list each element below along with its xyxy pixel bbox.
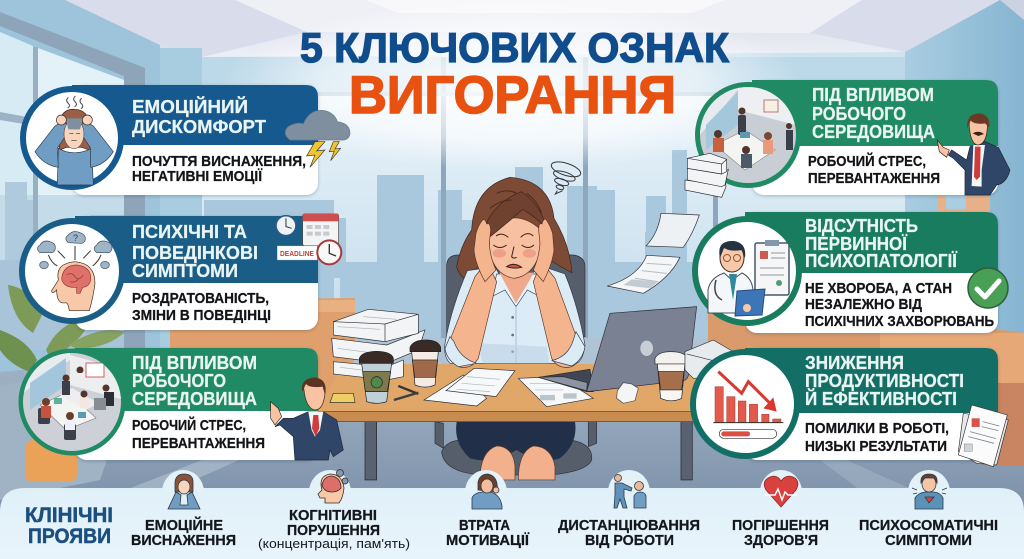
item: cognitive impairment: КОГНІТИВНІ [289,508,377,524]
icon: clock, calendar and deadline [276,214,341,264]
heading: ПСИХОПАТОЛОГІЇ [805,251,958,271]
desk [315,364,712,480]
description: НЕЗАЛЕЖНО ВІД [805,296,922,313]
heading: ДИСКОМФОРТ [132,117,266,137]
description [805,280,994,330]
description: ЗМІНИ В ПОВЕДІНЦІ [132,307,271,324]
item: psychosomatic symptoms: СИМПТОМИ [885,533,972,549]
plant and pot [0,285,125,482]
laptop [538,307,697,392]
icon: green check badge [968,268,1008,308]
description [132,416,265,452]
heading: ЕМОЦІЙНИЙ [132,96,248,117]
main illustration: exhausted woman at desk [315,159,733,480]
description: НИЗЬКІ РЕЗУЛЬТАТИ [805,438,947,455]
heading: КЛІНІЧНІ [25,504,113,527]
face [489,218,541,278]
back window [202,57,905,342]
item: psychosomatic symptoms: ПСИХОСОМАТИЧНІ [859,518,998,534]
facial features [493,234,534,268]
panel: mental and behavioural symptoms [22,214,341,330]
item: psychosomatic symptoms [859,470,998,549]
icon: person with chest pain [912,474,947,509]
heading: ПРОЯВИ [28,525,111,548]
description [132,153,306,185]
description: РОЗДРАТОВАНІСТЬ, [132,290,269,307]
deadline tag text: DEADLINE [280,249,314,258]
item: cognitive impairment [258,470,410,551]
floor [0,340,1024,559]
icon: stack of papers [685,153,728,197]
icon: pointing manager [271,377,343,460]
description: ПОМИЛКИ В РОБОТІ, [805,420,949,437]
desk papers [424,368,593,407]
item: distancing from work [558,470,700,549]
heading [25,504,113,548]
item: emotional exhaustion: ЕМОЦІЙНЕ [145,516,223,534]
stress swirl [550,159,582,194]
heading [132,96,266,137]
heading: ПСИХІЧНІ ТА [132,222,247,242]
coffee cup, dark lid [359,351,393,403]
icon: falling bar chart [713,372,783,438]
sticky note and pens [330,386,418,403]
heading [132,353,257,409]
takeaway cup, white lid [655,352,687,401]
skirt and knees [456,422,575,480]
item: cognitive impairment: (концентрація, пам'ять) [258,536,410,551]
icon: stressed woman [35,96,113,185]
hands on head [474,220,496,282]
heading: СИМПТОМИ [132,261,238,281]
arms [449,262,497,367]
title [300,24,729,125]
crumpled paper [617,383,638,403]
coffee cup, brown [410,340,441,387]
hair back [457,177,572,282]
heading: РОБОЧОГО [132,371,226,391]
description: РОБОЧИЙ СТРЕС, [132,416,246,434]
sleeve cuffs [445,337,477,367]
heading: ЗНИЖЕННЯ [805,353,904,373]
icon: head with brain [318,470,348,503]
floating paper, top [646,213,699,247]
icon: heart with pulse [764,476,798,507]
heading [812,85,935,142]
question mark: ? [73,233,78,243]
heading: ПЕРВИННОЇ [805,234,908,254]
item: distancing from work: ДИСТАНЦІЮВАННЯ [558,518,700,534]
panel: reduced productivity [693,348,1008,467]
panel: clinical manifestations [0,470,1024,559]
title: 5 КЛЮЧОВИХ ОЗНАК [300,24,729,71]
item: loss of motivation [446,470,530,549]
right wall [905,0,1024,400]
heading [805,216,958,271]
left wall [0,0,160,400]
heading: СЕРЕДОВИЩА [132,389,257,409]
item: cognitive impairment: ПОРУШЕННЯ [287,523,380,539]
description: РОБОЧИЙ СТРЕС, [808,152,926,170]
blouse [445,265,585,363]
panel: emotional discomfort [23,85,350,195]
icon: manager with pointer [937,113,1010,195]
icon: storm cloud [285,110,350,167]
paper stack on desk [332,309,425,380]
icon: head with brain and thought clouds [37,231,112,311]
heading: ВІДСУТНІСТЬ [805,216,918,236]
description: ПОЧУТТЯ ВИСНАЖЕННЯ, [132,153,306,170]
heading: СЕРЕДОВИЩА [812,122,935,142]
description: ПЕРЕВАНТАЖЕННЯ [132,435,265,452]
item: emotional exhaustion [131,470,236,549]
item: health decline: ЗДОРОВ'Я [744,533,818,549]
soft haze behind the title [222,0,802,170]
item: health decline [732,470,829,549]
floating paper, lower [607,255,680,293]
item: health decline: ПОГІРШЕННЯ [732,518,829,534]
panel: workplace influence (left) [20,348,343,460]
icon: two figures [614,474,646,508]
title: ВИГОРАННЯ [349,66,676,125]
description: ПЕРЕВАНТАЖЕННЯ [808,170,940,187]
heading: ПОВЕДІНКОВІ [132,243,258,263]
description: НЕ ХВОРОБА, А СТАН [805,280,952,297]
office chair [435,255,597,475]
description: ПСИХІЧНИХ ЗАХВОРЮВАНЬ [805,313,994,330]
panel: workplace influence (right) [685,80,1010,197]
heading: РОБОЧОГО [812,104,906,124]
icon: woman holding head [168,474,200,509]
front hair [482,192,547,237]
icon: tired person [472,474,502,509]
heading: ПІД ВПЛИВОМ [812,85,934,105]
back furniture [170,298,355,420]
description [805,420,949,455]
heading: ПРОДУКТИВНОСТІ [805,371,964,391]
heading: Й ЕФЕКТИВНОСТІ [805,388,957,409]
icon: open-plan office [700,87,796,183]
description: НЕГАТИВНІ ЕМОЦІЇ [132,168,263,185]
description [808,152,940,187]
item: emotional exhaustion: ВИСНАЖЕННЯ [131,533,236,549]
item: distancing from work: ВІД РОБОТИ [585,533,674,549]
description [132,290,271,324]
icon: doctor with clipboard [708,240,789,316]
icon: busy office scene [23,353,121,451]
heading [132,222,258,281]
icon: document with errors [958,405,1008,467]
panel: absence of primary psychopathology [695,212,1008,333]
printer and paper tray [685,340,733,378]
heading: ПІД ВПЛИВОМ [132,353,257,373]
heading [805,353,964,409]
item: loss of motivation: МОТИВАЦІЇ [446,532,530,549]
item: loss of motivation: ВТРАТА [459,518,510,534]
